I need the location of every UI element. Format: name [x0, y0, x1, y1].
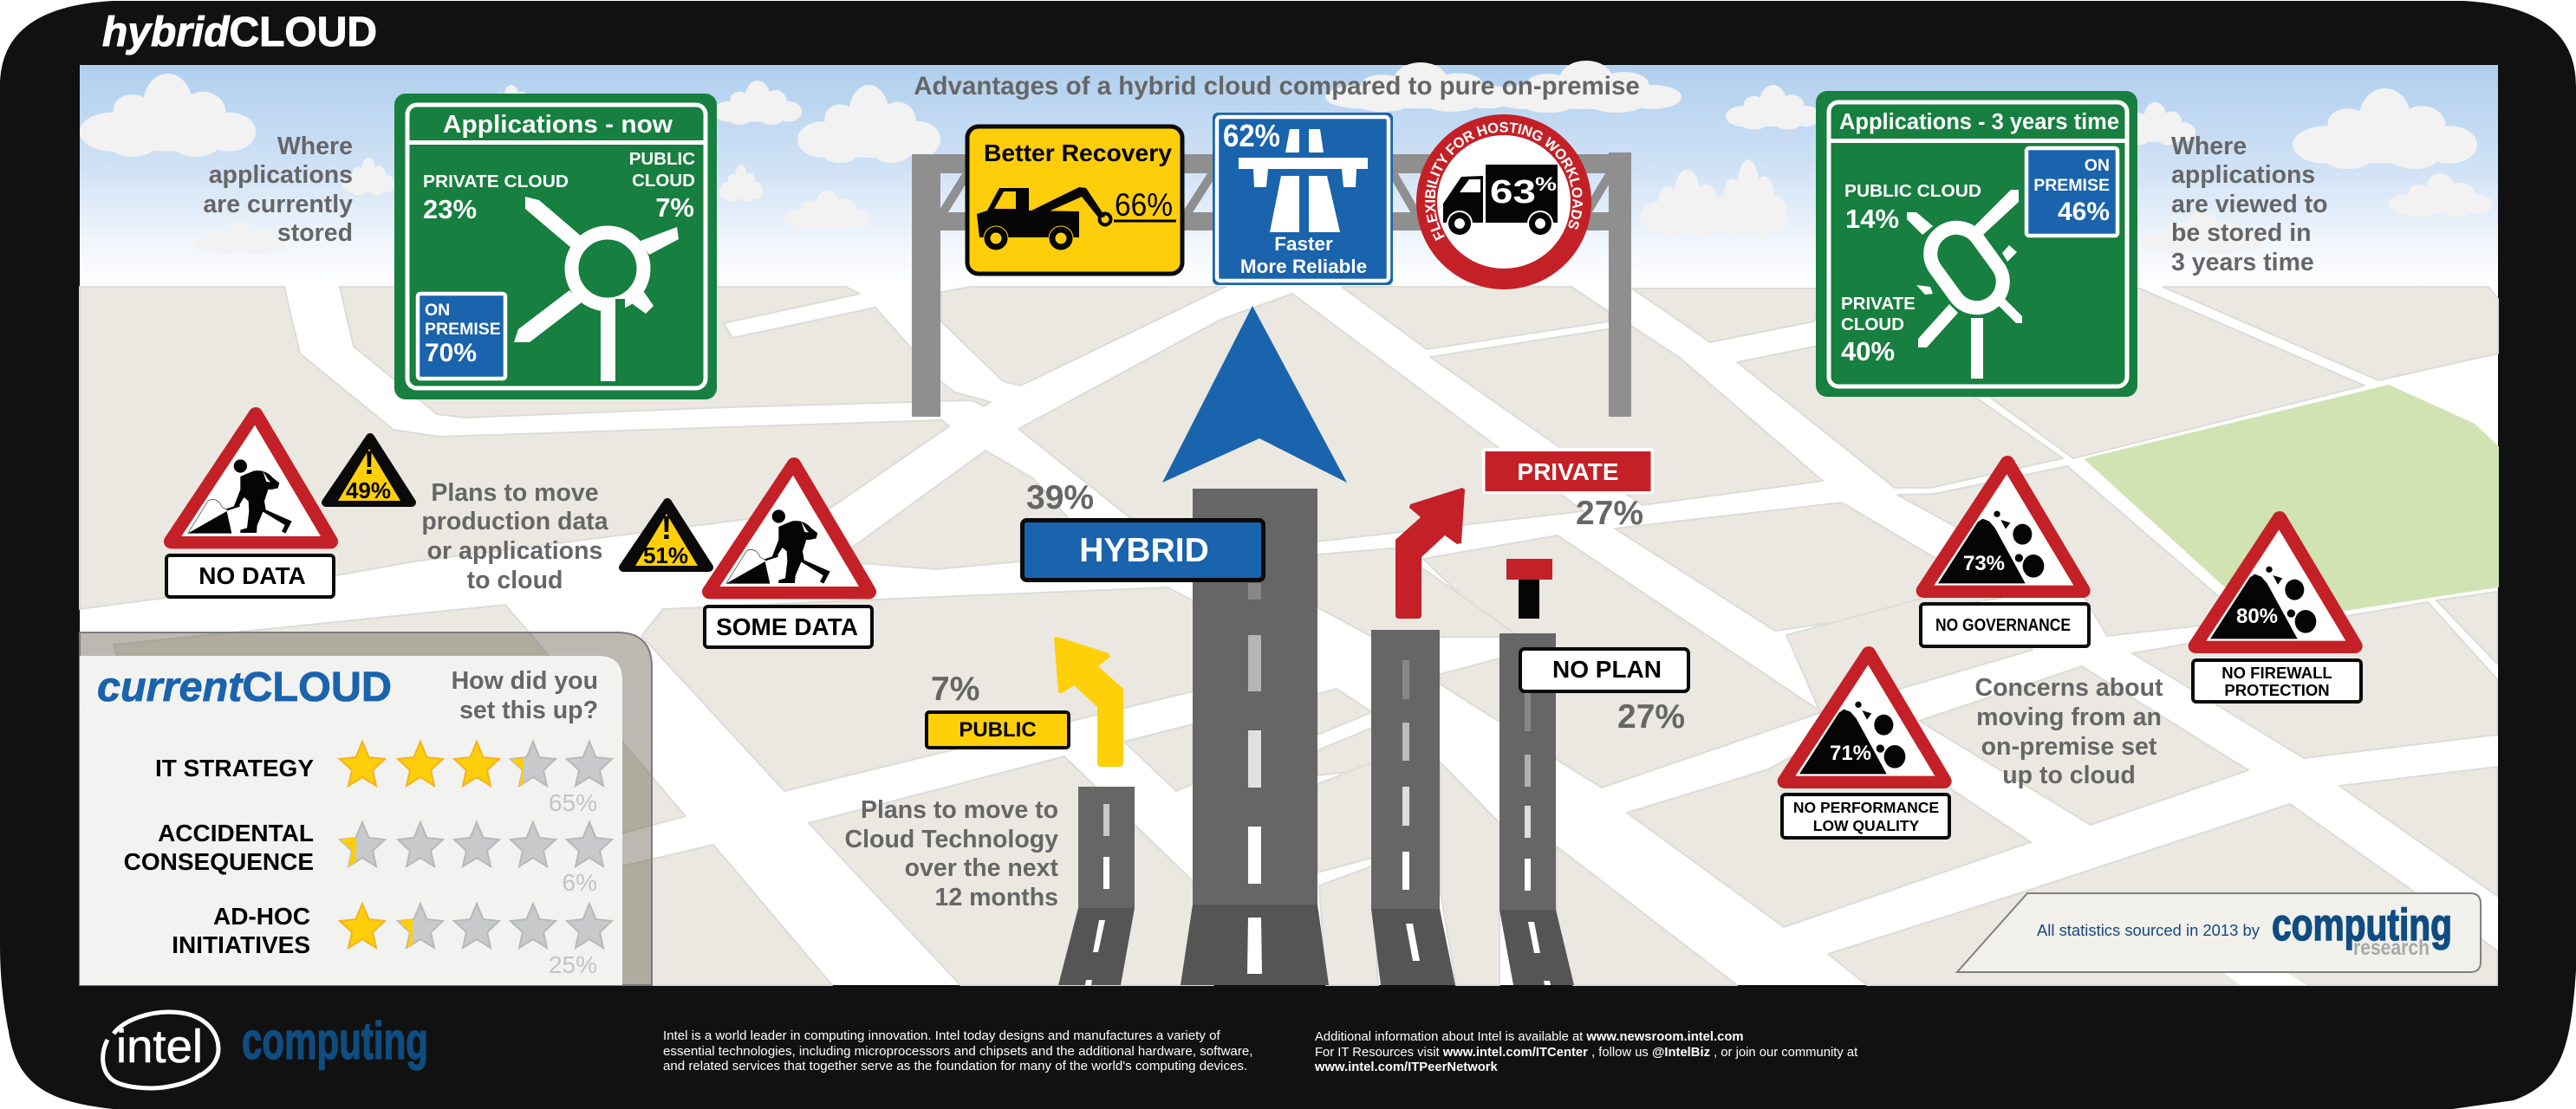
text: where applications are currently stored: Where	[277, 133, 353, 160]
sign: applications now: PRIVATE CLOUD	[423, 172, 569, 191]
warning sign: some data	[705, 464, 872, 647]
text: plans to move to cloud technology: 12 months	[934, 884, 1058, 911]
no entry post	[1506, 559, 1552, 619]
text: plans to move production data: Plans to move	[431, 479, 599, 507]
sign: applications in 3 years: PRIVATE	[1841, 294, 1916, 314]
warning sign: no firewall	[2193, 518, 2361, 702]
row: accidental consequence	[124, 820, 612, 896]
text: where applications are viewed: Where	[2171, 133, 2247, 160]
overhead gantry	[912, 152, 1631, 417]
text: plans to move production data: production data	[421, 508, 609, 535]
icon: motorway bridge	[1239, 129, 1368, 232]
warning sign: no data: NO DATA	[198, 562, 306, 589]
value: 27% no plan: 27%	[1617, 698, 1685, 736]
sign: applications now: PREMISE	[425, 320, 501, 339]
warning sign: no firewall: 80%	[2236, 605, 2278, 628]
warning: 51%	[623, 503, 709, 568]
text: where applications are currently stored: are currently	[203, 191, 353, 218]
sign: better recovery	[967, 126, 1182, 274]
road: no plan lane	[1499, 633, 1574, 985]
warning sign: some data: SOME DATA	[716, 613, 858, 640]
text: plans to move to cloud technology: over the next	[905, 854, 1059, 882]
sign: applications now: CLOUD	[632, 171, 695, 191]
warning: 49%	[326, 438, 412, 503]
label: private	[1482, 448, 1654, 494]
sign: applications in 3 years: PREMISE	[2033, 176, 2110, 195]
label: hybrid: HYBRID	[1079, 532, 1209, 569]
row: IT strategy: 65%	[549, 789, 597, 816]
sign: motorway: More Reliable	[1240, 256, 1367, 277]
logo: intel: intel	[116, 1021, 203, 1073]
warning sign: no firewall: NO FIREWALL	[2221, 664, 2332, 682]
logo: intel	[103, 1012, 218, 1088]
row: ad-hoc initiatives	[172, 903, 612, 978]
roundabout	[514, 197, 679, 381]
text: where applications are viewed: applications	[2171, 161, 2315, 189]
text: plans to move production data: to cloud	[467, 567, 563, 594]
label: no plan	[1520, 649, 1688, 691]
text: plans to move to cloud technology: Cloud Technology	[845, 826, 1058, 853]
warning sign: no governance: NO GOVERNANCE	[1935, 616, 2071, 635]
panel: current cloud: How did you	[452, 667, 598, 695]
warning: 49%: !	[364, 445, 374, 482]
small road on source panel area	[2202, 944, 2306, 985]
text: concerns: on-premise set	[1981, 733, 2157, 761]
heading: advantages: Advantages of a hybrid cloud compared to pure on-premise	[914, 72, 1640, 101]
row: accidental consequence: 6%	[563, 869, 597, 896]
map: roads and blocks	[80, 285, 2498, 985]
sign: applications now: Applications - now	[443, 111, 673, 139]
sign: better recovery: Better Recovery	[984, 139, 1172, 166]
warning: 51%: 51%	[643, 542, 688, 568]
sign: flexibility ring: FLEXIBILITY FOR HOSTING WORKLOADS	[1425, 121, 1583, 241]
sky background	[80, 65, 2498, 287]
arrow: public	[1054, 637, 1123, 767]
warning sign: no performance	[1782, 653, 1949, 838]
footer text: about intel: and related services that together serve as the foundation for many of the world's computing devices.	[663, 1059, 1247, 1073]
sign: applications in 3 years: 40%	[1841, 336, 1895, 366]
row: IT strategy: IT STRATEGY	[155, 755, 314, 781]
panel: source	[1957, 893, 2481, 972]
clouds	[80, 61, 2492, 255]
warning sign: no governance	[1921, 463, 2089, 646]
row: ad-hoc initiatives: INITIATIVES	[172, 931, 310, 958]
text: concerns: moving from an	[1976, 704, 2162, 731]
warning sign: no governance: 73%	[1963, 552, 2005, 575]
panel heading: currentCLOUD	[97, 665, 392, 710]
big blue arrow	[1162, 306, 1347, 483]
sign: flexibility ring: %	[1535, 173, 1557, 195]
icon: tow truck	[977, 187, 1111, 250]
sign: better recovery: 66%	[1115, 187, 1173, 223]
panel: current cloud	[80, 632, 652, 985]
text: where applications are viewed: 3 years time	[2171, 249, 2314, 276]
label: private: PRIVATE	[1517, 458, 1619, 485]
row: ad-hoc initiatives: 25%	[549, 951, 597, 978]
oval roundabout	[1907, 190, 2022, 379]
text: where applications are viewed: are viewed to	[2171, 191, 2328, 218]
sign: motorway: 62%	[1223, 118, 1280, 153]
warning sign: no performance: LOW QUALITY	[1813, 817, 1920, 834]
sign: applications now: 70%	[425, 339, 477, 367]
arrow: private	[1395, 488, 1465, 619]
text: concerns: Concerns about	[1975, 674, 2163, 702]
text: where applications are currently stored: stored	[277, 219, 353, 247]
label: hybrid	[1023, 520, 1264, 580]
label: no plan: NO PLAN	[1552, 656, 1662, 683]
text: concerns: up to cloud	[2002, 762, 2136, 789]
panel: source: computing	[2272, 900, 2452, 950]
warning sign: no performance: 71%	[1830, 742, 1871, 765]
sign: applications in 3 years	[1816, 91, 2137, 397]
row: IT strategy	[155, 742, 612, 816]
sign: applications now: 23%	[423, 194, 477, 224]
label: public: PUBLIC	[959, 718, 1037, 742]
road: hybrid lane	[1181, 489, 1329, 985]
warning: 51%: !	[661, 510, 672, 547]
footer text: additional information: Additional information about Intel is available at www.newsroom.intel.com	[1315, 1030, 1744, 1044]
warning: 49%: 49%	[346, 477, 391, 503]
value: 27% private: 27%	[1576, 495, 1643, 532]
logo: computing: computing	[242, 1012, 428, 1070]
row: accidental consequence: ACCIDENTAL	[158, 820, 314, 846]
row: ad-hoc initiatives: AD-HOC	[213, 903, 310, 930]
title: hybridCLOUD	[102, 10, 377, 55]
text: plans to move production data: or applications	[427, 537, 602, 565]
sign: flexibility ring: 63	[1490, 174, 1536, 211]
text: plans to move to cloud technology: Plans to move to	[861, 796, 1058, 824]
text: where applications are viewed: be stored in	[2171, 219, 2312, 247]
sign: motorway	[1213, 113, 1393, 285]
label: public	[927, 712, 1069, 748]
sign: applications now: ON	[425, 301, 450, 320]
sign: applications in 3 years: 46%	[2058, 198, 2110, 226]
footer text: additional information: For IT Resources visit www.intel.com/ITCenter , follow us @IntelBiz , or join our community at	[1315, 1046, 1857, 1060]
value: 7%: 7%	[931, 671, 979, 708]
warning sign: no firewall: PROTECTION	[2224, 681, 2330, 699]
panel: current cloud: set this up?	[459, 697, 598, 724]
row: accidental consequence: CONSEQUENCE	[124, 848, 314, 875]
sign: applications in 3 years: Applications - 3 years time	[1839, 110, 2119, 134]
sign: applications now: 7%	[655, 192, 694, 223]
road: private lane	[1371, 630, 1455, 985]
sign: applications now	[394, 94, 717, 399]
value: 39%: 39%	[1026, 479, 1094, 516]
panel: source: All statistics sourced in 2013 by	[2037, 921, 2261, 939]
road: public lane	[1058, 787, 1135, 985]
sign: applications now: PUBLIC	[629, 149, 695, 169]
footer text: about intel: essential technologies, including microprocessors and chipsets and the additional hardware, software,	[663, 1044, 1252, 1059]
footer text: additional information: www.intel.com/ITPeerNetwork	[1314, 1060, 1499, 1074]
sign: applications in 3 years: ON	[2085, 156, 2110, 175]
panel: source: research	[2353, 936, 2430, 960]
warning sign: no performance: NO PERFORMANCE	[1793, 799, 1939, 816]
sign: flexibility ring	[1416, 114, 1591, 289]
text: where applications are currently stored: applications	[209, 161, 353, 189]
icon: van	[1443, 165, 1558, 237]
sign: applications in 3 years: 14%	[1845, 204, 1899, 234]
sign: applications in 3 years: PUBLIC CLOUD	[1844, 181, 1981, 201]
warning sign: no data	[166, 414, 334, 597]
footer text: about intel: Intel is a world leader in computing innovation. Intel today designs and manufactures a variety of	[663, 1028, 1220, 1043]
sign: motorway: Faster	[1274, 233, 1333, 255]
sign: applications in 3 years: CLOUD	[1841, 315, 1904, 334]
